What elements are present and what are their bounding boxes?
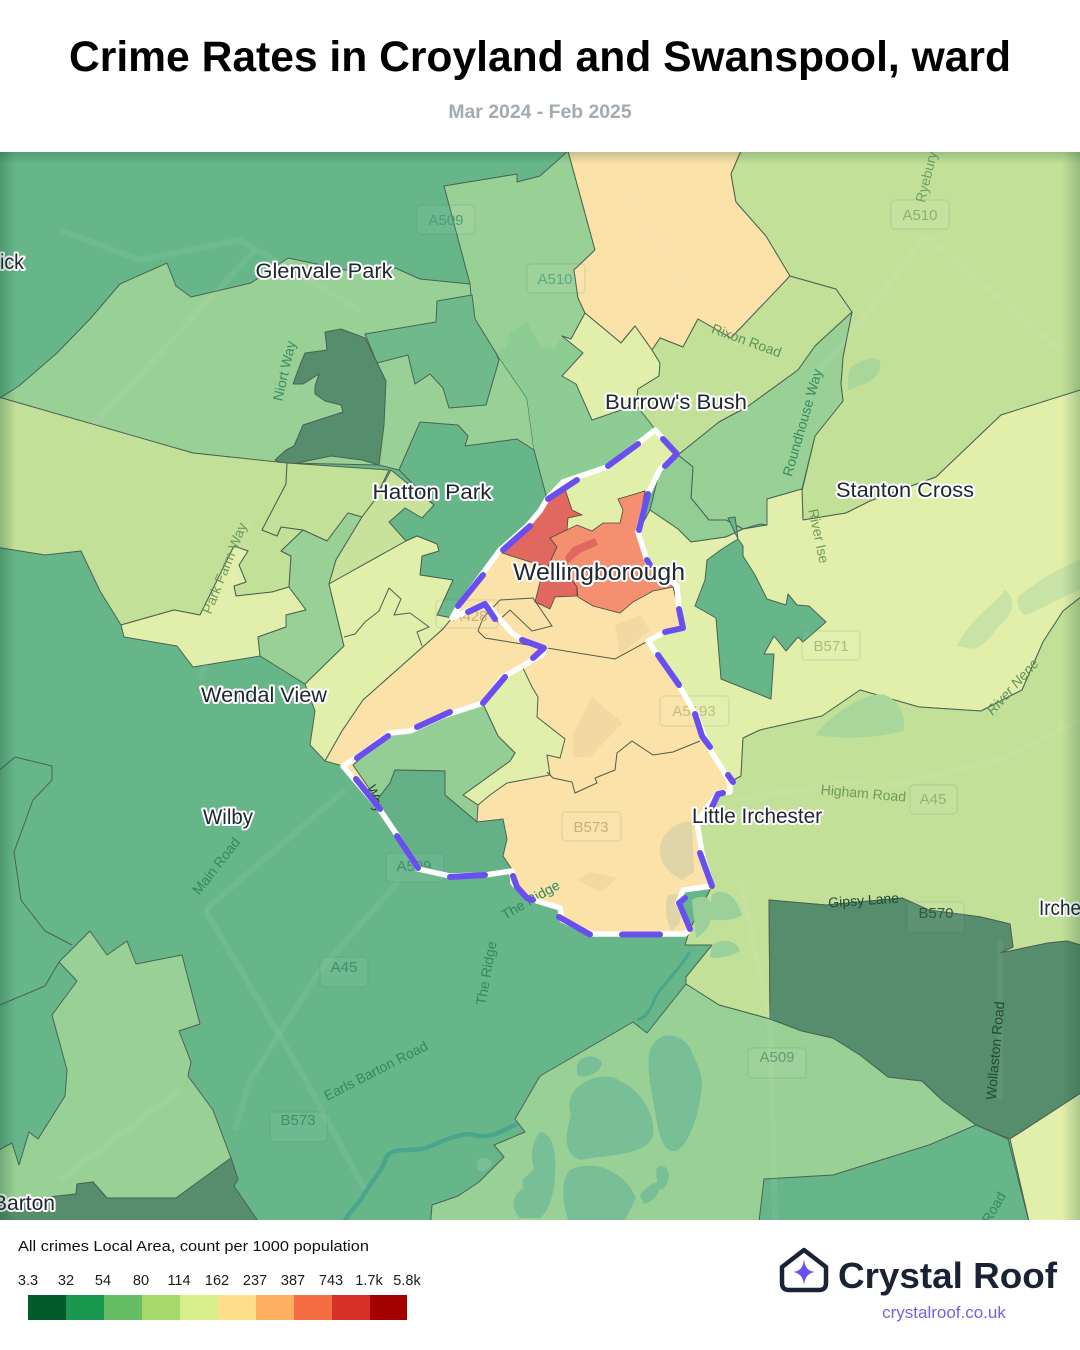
ward boundary: white line xyxy=(343,430,730,934)
road name labels: The Ridge xyxy=(499,876,563,923)
road name labels: Road xyxy=(978,1189,1009,1226)
road numbers: B573 xyxy=(280,1112,316,1129)
road name labels: Earls Barton Road xyxy=(321,1037,430,1104)
road name labels: Gipsy Lane xyxy=(828,890,900,910)
road name labels: Niort Way xyxy=(269,339,299,402)
legend tick labels: 387 xyxy=(281,1273,305,1289)
ward: northern pale area xyxy=(564,434,673,530)
place labels: Hatton Park xyxy=(372,481,492,504)
ward: high crime red district xyxy=(502,489,582,609)
road name labels: Wollaston Road xyxy=(983,1001,1007,1100)
road name labels: Roundhouse Way xyxy=(779,367,825,478)
road name labels xyxy=(189,150,1042,1226)
road numbers: A510 xyxy=(902,207,938,224)
website url: crystalroof.co.uk xyxy=(882,1303,1006,1322)
road numbers: B570 xyxy=(918,905,954,922)
road numbers: A45 xyxy=(331,959,357,976)
road name labels: River Nene xyxy=(983,655,1042,718)
road name labels: The Ridge xyxy=(473,940,500,1006)
map base: medium green area xyxy=(0,152,1080,1220)
road name labels: Main Road xyxy=(189,834,243,898)
place labels: Burrow's Bush xyxy=(605,391,747,414)
place labels xyxy=(0,251,1080,1215)
place labels: Little Irchester xyxy=(692,805,822,828)
logo: Crystal Roof xyxy=(782,1250,1058,1322)
legend tick labels: 162 xyxy=(205,1273,229,1289)
title: Crime Rates in Croyland and Swanspool, ward xyxy=(69,33,1011,81)
place labels: Wilby xyxy=(203,806,253,829)
map regions xyxy=(0,151,1080,1230)
road numbers xyxy=(280,207,954,1129)
map: eastern lakes xyxy=(815,358,1080,738)
map: road network xyxy=(91,236,1003,1190)
road numbers: A45 xyxy=(920,791,946,808)
legend tick labels: 743 xyxy=(319,1273,343,1289)
map: rivers xyxy=(344,1124,517,1222)
road numbers: A509 xyxy=(759,1049,795,1066)
road name labels: Way xyxy=(363,783,388,814)
legend tick labels: 80 xyxy=(133,1273,149,1289)
ward: peach area xyxy=(324,552,728,932)
road numbers: A5193 xyxy=(672,703,716,720)
road numbers: A509 xyxy=(428,212,464,229)
map edge shading xyxy=(0,152,1080,1220)
ward: inner red strip xyxy=(565,538,598,564)
ward boundary: purple dashes xyxy=(356,439,733,934)
place labels: Wendal View xyxy=(201,684,328,707)
road name labels: Higham Road xyxy=(820,781,907,805)
ward: southwestern dark green area xyxy=(377,770,513,876)
ward: salmon district xyxy=(550,491,673,613)
legend tick labels: 32 xyxy=(58,1273,74,1289)
legend tick labels xyxy=(18,1273,421,1289)
road numbers: B571 xyxy=(813,638,849,655)
place labels: Wellingborough xyxy=(513,559,685,586)
subtitle: date range: Mar 2024 - Feb 2025 xyxy=(448,101,632,123)
road numbers: B573 xyxy=(573,819,609,836)
road name labels: Ryebury xyxy=(912,150,940,204)
legend tick labels: 237 xyxy=(243,1273,267,1289)
legend colour bar xyxy=(28,1295,407,1320)
road numbers: A428 xyxy=(452,608,488,625)
legend tick labels: 5.8k xyxy=(393,1273,421,1289)
road name labels: Rixon Road xyxy=(710,320,784,360)
icon: house with star xyxy=(782,1250,826,1290)
road number shields xyxy=(325,200,964,1112)
logo wordmark: Crystal Roof xyxy=(838,1255,1058,1296)
road name labels: River Ise xyxy=(805,507,833,565)
place labels: Glenvale Park xyxy=(256,260,393,283)
road name labels: Park Farm Way xyxy=(199,520,250,616)
legend xyxy=(18,1239,421,1320)
legend tick labels: 114 xyxy=(167,1273,191,1289)
legend tick labels: 1.7k xyxy=(355,1273,383,1289)
map: lakes and water xyxy=(477,892,742,1222)
ward: interior lines xyxy=(478,598,700,793)
place labels: Stanton Cross xyxy=(836,479,974,502)
legend tick labels: 3.3 xyxy=(18,1273,38,1289)
map district lines xyxy=(0,588,429,1007)
road numbers: A509 xyxy=(396,858,432,875)
place labels: ick xyxy=(0,251,24,274)
ward: western green area xyxy=(353,704,515,822)
ward: pale inset area xyxy=(463,668,565,805)
legend tick labels: 54 xyxy=(95,1273,111,1289)
legend title: All crimes Local Area, count per 1000 population xyxy=(18,1239,369,1255)
ward: tan land-use patches xyxy=(573,615,694,931)
road numbers: A510 xyxy=(537,271,573,288)
